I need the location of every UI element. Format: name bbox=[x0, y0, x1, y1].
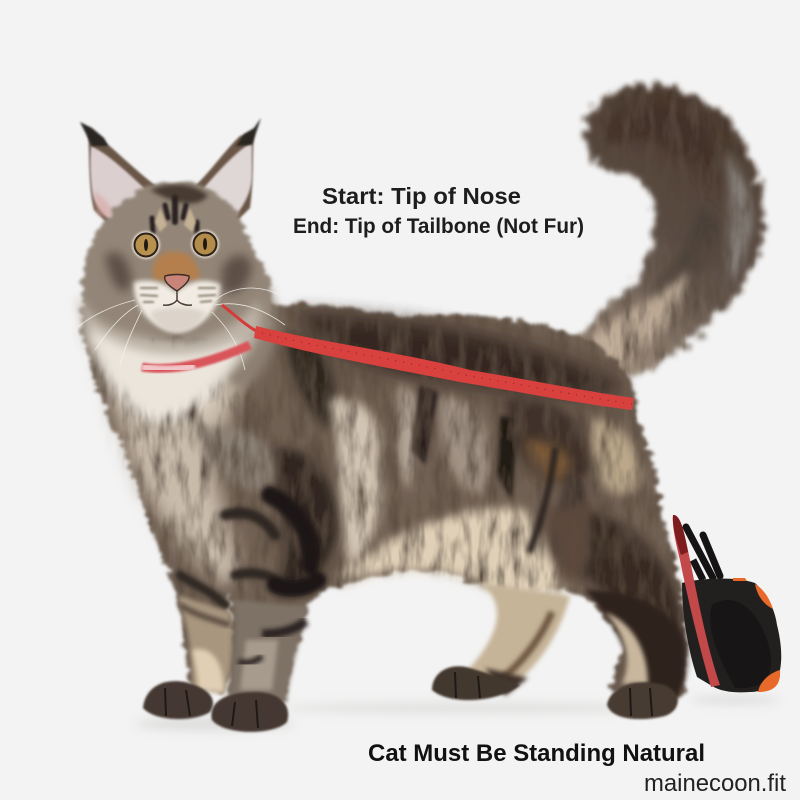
watermark: mainecoon.fit bbox=[644, 770, 786, 797]
rear front leg bbox=[466, 582, 570, 692]
tape measure strap bbox=[142, 305, 634, 410]
mid-flank tones bbox=[328, 398, 381, 565]
dark side cheeks bbox=[105, 252, 132, 291]
toe lines bbox=[165, 672, 652, 728]
body stripes bbox=[180, 450, 555, 605]
case bbox=[682, 578, 781, 692]
muzzle orange bbox=[152, 252, 200, 280]
tail bbox=[574, 85, 763, 376]
orange corners bbox=[755, 584, 773, 609]
ruff fur bbox=[78, 295, 261, 391]
right ear bbox=[195, 132, 254, 228]
whiskers bbox=[75, 288, 285, 370]
ground shadows bbox=[135, 696, 780, 731]
body fur mass bbox=[82, 270, 686, 700]
forehead dark bbox=[150, 185, 208, 203]
cat body bbox=[82, 270, 686, 700]
haunch bbox=[575, 510, 684, 690]
right eye bbox=[191, 230, 219, 258]
rear paws bbox=[432, 666, 520, 700]
legs and paws bbox=[143, 582, 686, 732]
paws bbox=[211, 692, 288, 732]
tape across back bbox=[254, 326, 634, 410]
neck side fur bbox=[225, 250, 278, 387]
front leg far bbox=[178, 595, 232, 694]
light chest bbox=[105, 350, 246, 590]
head bbox=[75, 118, 285, 418]
caption: Cat Must Be Standing Natural bbox=[368, 740, 705, 767]
forehead stripes bbox=[152, 198, 197, 234]
left eye bbox=[132, 231, 160, 259]
nose bbox=[165, 274, 189, 291]
collar section bbox=[142, 345, 250, 369]
front leg near bbox=[228, 600, 308, 702]
dark back bbox=[295, 312, 625, 397]
prongs bbox=[686, 527, 713, 578]
muzzle spots bbox=[140, 288, 216, 302]
belly bbox=[340, 508, 565, 595]
hanging tape bbox=[673, 515, 720, 687]
ear tufts bbox=[80, 118, 261, 146]
left ear bbox=[88, 134, 156, 228]
muzzle white bbox=[134, 280, 220, 332]
tape measure device bbox=[673, 515, 781, 692]
label: start: Start: Tip of Nose bbox=[322, 183, 521, 209]
head fur bbox=[82, 183, 272, 338]
rear leg bbox=[585, 590, 686, 700]
label: end: End: Tip of Tailbone (Not Fur) bbox=[293, 215, 584, 238]
